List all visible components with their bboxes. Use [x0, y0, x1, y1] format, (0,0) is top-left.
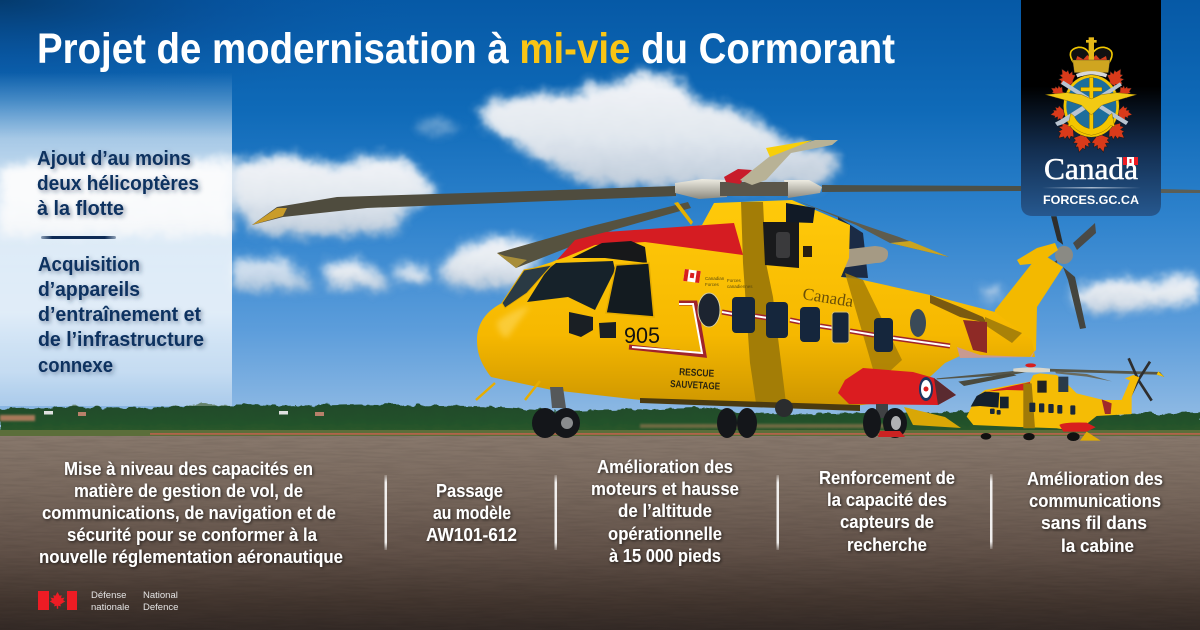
- panel text: training devices: connexe: [38, 354, 113, 377]
- footer: National Defence signature: [38, 590, 178, 613]
- bottom text: search sensors: capteurs de: [840, 511, 934, 532]
- shadow bands across fuselage: [741, 202, 786, 403]
- cabin windows: [698, 293, 926, 352]
- main rotor head and blades: [252, 140, 1200, 225]
- panel text: training devices: d’appareils: [38, 278, 140, 301]
- red top section: [557, 223, 743, 260]
- bottom text: flight management upgrade: sécurité pour se conformer à la: [67, 524, 318, 545]
- website: FORCES.GC.CA: [1043, 195, 1139, 207]
- rear rotor blades: [497, 200, 949, 268]
- intake and cowling: [763, 203, 815, 268]
- bottom text: flight management upgrade: nouvelle réglementation aéronautique: [39, 546, 343, 567]
- lower fuselage dark strip: [640, 398, 860, 411]
- bottom text: AW101-612 model: au modèle: [433, 502, 511, 523]
- bottom text: engines and altitude: à 15 000 pieds: [609, 545, 721, 566]
- bottom text: search sensors: la capacité des: [827, 489, 947, 510]
- aircraft number: 905: [624, 323, 660, 348]
- bottom text: wireless cabin communications: la cabine: [1061, 535, 1134, 556]
- flag and Canadian Forces marking on fuselage: Canadian: [705, 276, 725, 281]
- bottom text: flight management upgrade: matière de gestion de vol, de: [74, 480, 303, 501]
- bottom text: wireless cabin communications: [1027, 468, 1163, 556]
- fuselage stripes: [629, 303, 950, 355]
- fuselage: [477, 200, 1035, 407]
- helicopter: main Cormorant 905: [252, 140, 1200, 438]
- panel: left translucent backdrop: [0, 72, 232, 406]
- bottom text: wireless cabin communications: communications: [1029, 490, 1161, 511]
- rescue lettering: [670, 367, 721, 393]
- bottom text: wireless cabin communications: sans fil dans: [1041, 512, 1147, 533]
- small rotor blades: [937, 369, 1164, 386]
- panel text: additions to fleet: Ajout d’au moins: [37, 147, 191, 170]
- title: Projet de modernisation à mi-vie du Cormorant: [37, 25, 895, 73]
- flag and Canadian Forces marking on fuselage: canadiennes: [727, 284, 753, 289]
- bottom text: AW101-612 model: [426, 480, 517, 545]
- crossed swords: [1055, 82, 1122, 126]
- panel text: additions to fleet: à la flotte: [37, 197, 124, 220]
- bottom text: flight management upgrade: communications, de navigation et de: [42, 502, 336, 523]
- panel text: additions to fleet: [37, 147, 199, 220]
- bottom text: wireless cabin communications: Amélioration des: [1027, 468, 1163, 489]
- blue shield: [1063, 75, 1119, 137]
- footer: National Defence signature: Défense: [91, 590, 126, 601]
- crown: [1070, 37, 1112, 77]
- tree line and field: [0, 404, 1200, 437]
- tarmac ground: [0, 436, 1200, 630]
- maple leaves: [1048, 65, 1135, 155]
- footer: National Defence signature: Defence: [143, 602, 178, 613]
- Canada wordmark: Canada: [1044, 151, 1138, 186]
- icon: Canadian Forces crest: [1045, 37, 1137, 155]
- flag and Canadian Forces marking on fuselage: Forces: [705, 282, 720, 287]
- panel text: training devices: Acquisition: [38, 253, 140, 276]
- helicopter: small Cormorant in background: [937, 358, 1164, 441]
- flag and Canadian Forces marking on fuselage: [683, 269, 753, 289]
- footer: National Defence signature: National: [143, 590, 178, 601]
- icon: Canada flag symbol: [1123, 157, 1138, 165]
- panel text: training devices: de l’infrastructure: [38, 328, 204, 351]
- background: blue sky: [0, 0, 1200, 440]
- bottom text: AW101-612 model: AW101-612: [426, 524, 517, 545]
- cockpit windshields: [502, 261, 654, 338]
- panel text: training devices: d’entraînement et: [38, 303, 201, 326]
- bottom text: search sensors: recherche: [847, 534, 927, 555]
- panel text: training devices: [38, 253, 204, 377]
- rescue lettering: SAUVETAGE: [670, 379, 721, 393]
- bottom text: flight management upgrade: [39, 458, 343, 567]
- panel text: additions to fleet: deux hélicoptères: [37, 172, 199, 195]
- highlights on nose: [497, 306, 530, 338]
- engine housing: [838, 217, 888, 278]
- small fuselage: [967, 373, 1139, 432]
- bottom text: engines and altitude: de l’altitude: [618, 500, 712, 521]
- tail rotor: [1030, 217, 1096, 329]
- divider: [41, 236, 116, 239]
- tail markings: [930, 295, 1035, 358]
- bottom text: engines and altitude: Amélioration des: [597, 456, 733, 477]
- bottom text: search sensors: Renforcement de: [819, 467, 955, 488]
- small tail rotor: [1129, 358, 1152, 401]
- clouds: [0, 72, 1200, 313]
- bottom text: search sensors: [819, 467, 955, 555]
- wings: [1045, 93, 1137, 115]
- bottom text: flight management upgrade: Mise à niveau des capacités en: [64, 458, 313, 479]
- bottom text: engines and altitude: [591, 456, 739, 566]
- flag and Canadian Forces marking on fuselage: Forces: [727, 278, 742, 283]
- footer: National Defence signature: nationale: [91, 602, 130, 613]
- landing gear: [476, 381, 907, 438]
- black canopy top: [572, 241, 647, 263]
- rescue lettering: RESCUE: [679, 367, 715, 380]
- red sponson with roundel: [838, 368, 961, 428]
- anchor: [1068, 77, 1115, 135]
- fin and tailplane: [990, 243, 1063, 356]
- bottom text: AW101-612 model: Passage: [436, 480, 503, 501]
- icon: Canadian flag: [38, 591, 77, 610]
- Canada wordmark on fuselage: Canada: [801, 284, 855, 311]
- bottom text: engines and altitude: moteurs et hausse: [591, 478, 739, 499]
- logo panel: Canadian Forces: [1021, 0, 1161, 216]
- bottom text: engines and altitude: opérationnelle: [608, 523, 722, 544]
